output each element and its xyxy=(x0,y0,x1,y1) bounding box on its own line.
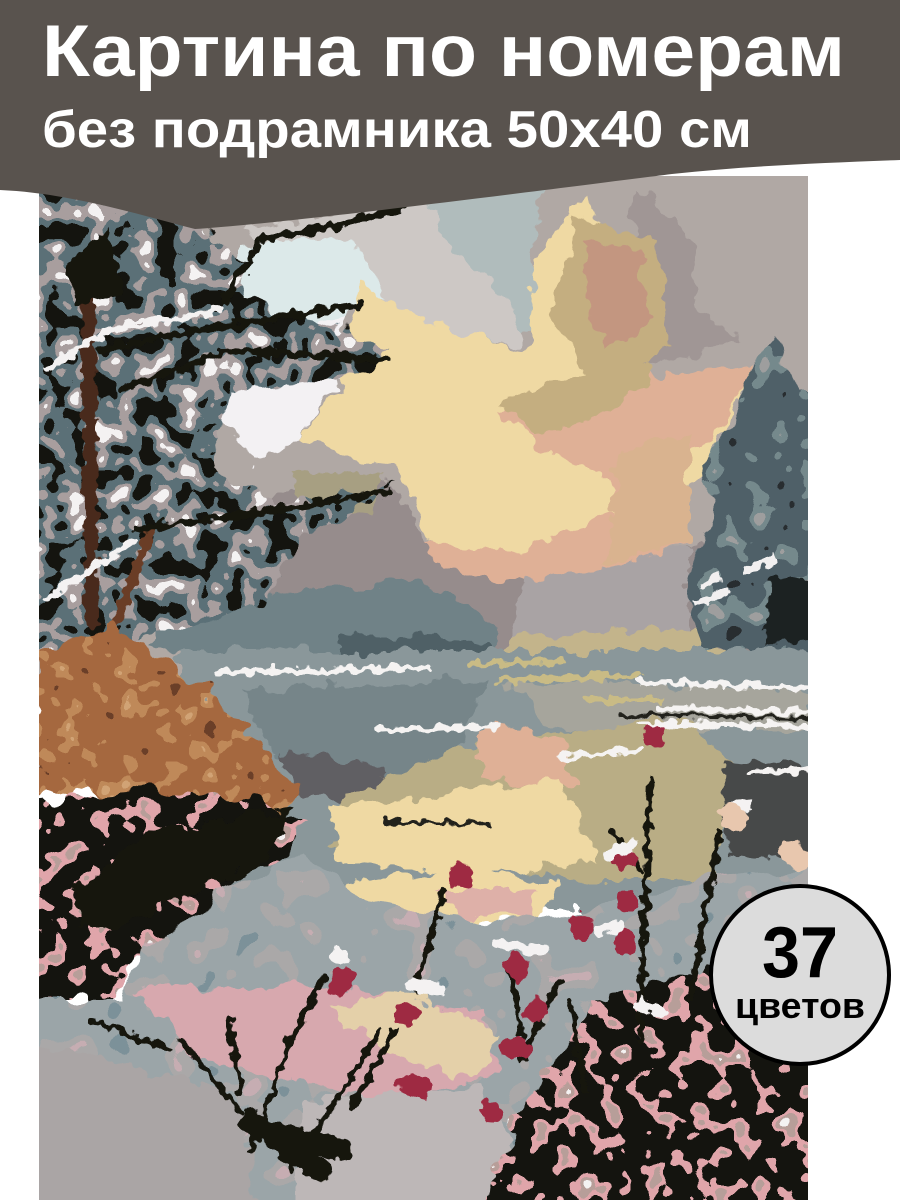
title: Картина по номерам xyxy=(42,11,845,92)
pink and cream snow patches xyxy=(20,985,560,1200)
tree trunks and branches xyxy=(45,205,410,640)
badge: 37 colours xyxy=(711,886,889,1064)
left shrub dark core xyxy=(75,810,290,925)
flower stems and blooms xyxy=(335,735,800,1112)
brown reeds xyxy=(39,620,300,816)
header banner xyxy=(0,0,900,229)
sky xyxy=(39,176,808,676)
tree line and far shore xyxy=(150,470,810,670)
lake water xyxy=(180,650,820,925)
fir tree on the right xyxy=(685,335,815,650)
black shrubs with blossoms left xyxy=(30,790,310,1000)
flower bush right xyxy=(480,970,815,1200)
bottom left shrub xyxy=(90,890,445,1170)
badge: 37 colours: 37 xyxy=(762,913,838,993)
fir lower shadow and snow xyxy=(695,560,815,645)
painting: winter lake at sunset xyxy=(20,150,830,1200)
subtitle: без подрамника 50х40 см xyxy=(42,101,752,159)
left tree foliage mosaic xyxy=(30,180,390,660)
water highlights xyxy=(220,662,808,824)
badge: 37 colours: цветов xyxy=(735,985,865,1026)
snowy foreground xyxy=(20,850,820,1200)
